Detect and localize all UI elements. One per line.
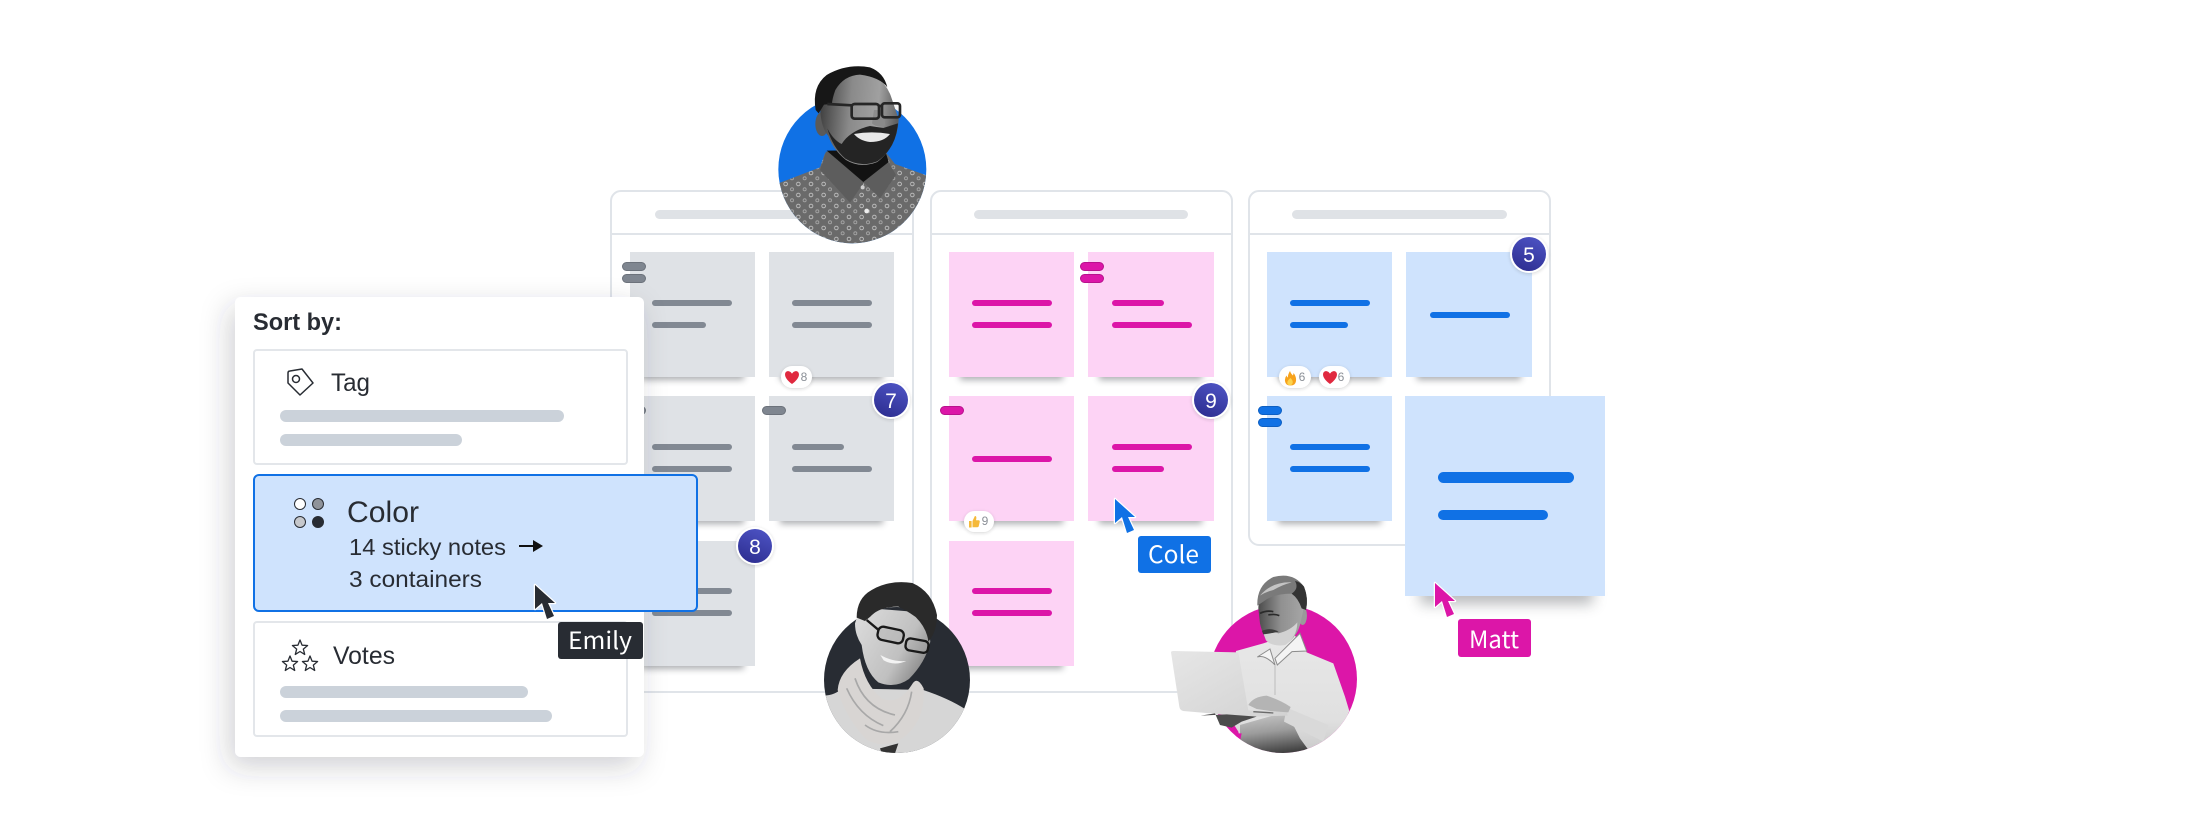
option: tag: Tag [331,369,370,397]
cursor: Matt [1435,583,1531,657]
count badge: 7 [872,381,910,419]
sticky note: pink 3 [949,396,1074,524]
count badge: 8 [736,527,774,565]
sticky note: enlarged blue note being dragged [1405,396,1605,604]
reaction: heart 6 [1319,366,1350,388]
sticky note: blue 3 [1267,396,1392,524]
sticky note: blue 1 [1267,252,1392,380]
icon: stars [282,640,318,670]
illustration: sort sticky notes board [215,66,1605,781]
avatar: man with laptop on magenta circle [1171,576,1357,757]
tag: gray second row left [622,406,646,414]
sticky note: pink 1 [949,252,1074,380]
tags: gray stacked [622,262,646,282]
option: votes [254,622,627,736]
avatar: man with glasses on blue circle [777,66,930,250]
count badge: 8: 8 [749,536,761,559]
reaction: heart 8: 8 [801,370,808,384]
cursor: Emily: Emily [568,621,633,656]
tags: pink stacked [1080,262,1104,282]
icon: color dots [294,498,324,528]
reaction: heart 6: 6 [1338,370,1345,384]
tag: gray second row right [762,406,786,414]
count badge: 5 [1510,235,1548,273]
sticky note: gray 4 [769,396,894,524]
panel: pink container [931,191,1232,692]
cursor: Cole [1115,499,1211,573]
panel: blue container [1249,191,1550,545]
count badge: 9: 9 [1205,390,1217,413]
heading: sort by: Sort by: [253,309,342,336]
option: color selected: 3 containers [349,566,482,592]
sticky note: pink 2 [1088,252,1214,380]
reaction: thumbs up 9: 9 [982,514,989,528]
panel: sort by menu [235,297,697,757]
reaction: fire 6: 6 [1299,370,1306,384]
sticky note: pink 5 [949,541,1074,669]
count badge: 7: 7 [885,390,897,413]
sticky note: blue 2 [1406,252,1532,380]
cursor: Cole: Cole [1148,535,1199,570]
option: color selected: 14 sticky notes [349,534,506,560]
tags: blue stacked [1258,406,1282,426]
sticky note: gray 2 [769,252,894,380]
sticky note: gray 5 [630,541,755,669]
option: color selected: Color [347,496,419,529]
reaction: fire 6 [1279,366,1311,388]
arrow [519,540,543,552]
sticky note: pink 4 [1088,396,1214,524]
cursor: Emily [535,585,643,659]
option: tag [254,350,627,464]
avatar: woman with scarf on dark circle [822,582,975,762]
reaction: thumbs up 9 [964,511,994,532]
icon: tag [288,369,313,395]
tag: pink second row [940,406,964,414]
sticky note: gray 1 [630,252,755,380]
reaction: heart 8 [781,366,812,388]
count badge: 9 [1192,381,1230,419]
option: votes: Votes [333,642,395,670]
sticky note: gray 3 [630,396,755,524]
option: color selected [254,475,697,611]
count badge: 5: 5 [1523,244,1535,267]
cursor: Matt: Matt [1469,620,1519,655]
panel: gray container [611,191,913,692]
